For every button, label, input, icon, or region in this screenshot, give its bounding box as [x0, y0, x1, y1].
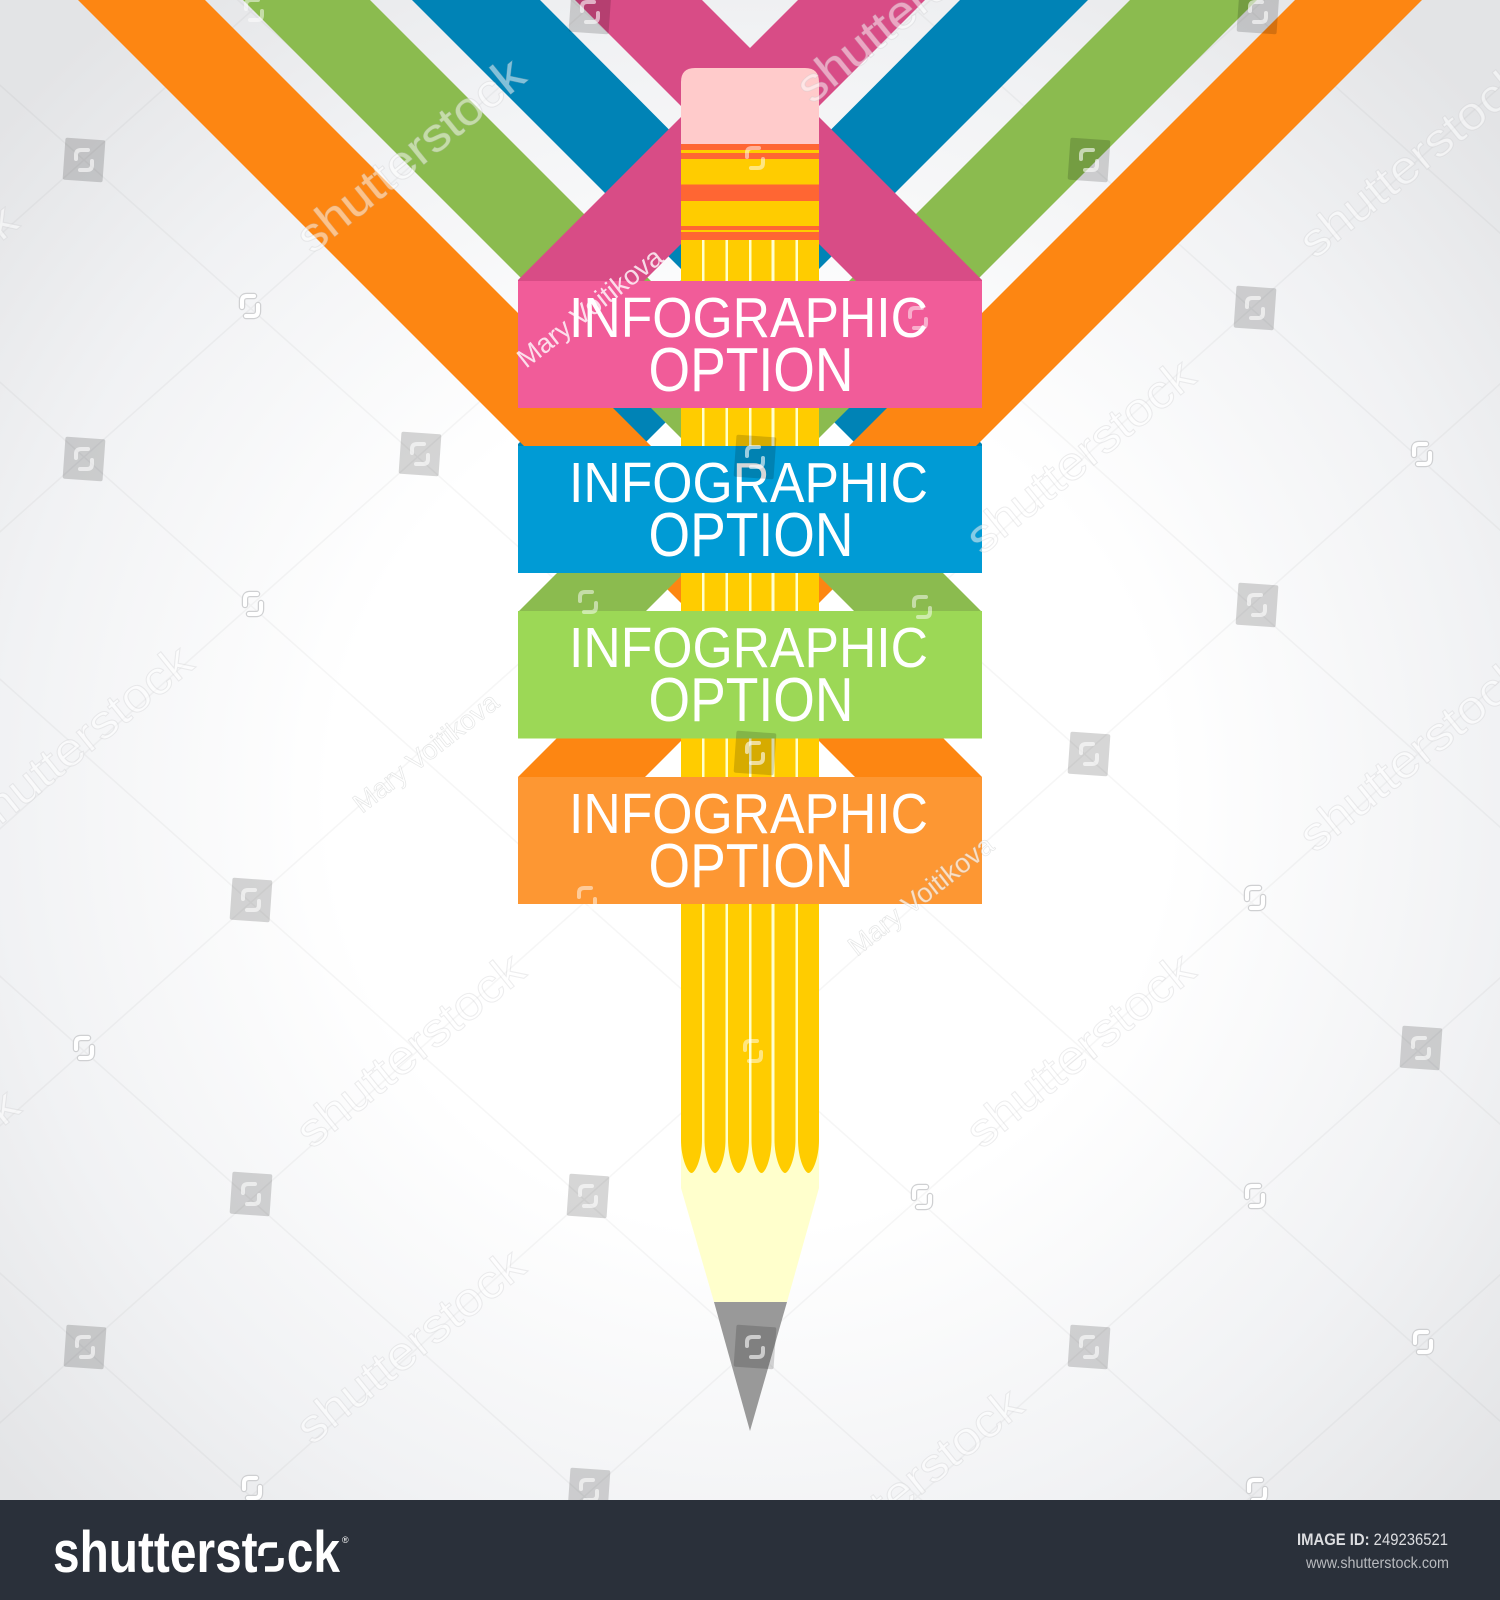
watermark: shutterstock text: shutterstock: [955, 941, 1205, 1158]
ribbon strands: orange: [78, 0, 1422, 777]
pencil eraser: [681, 68, 819, 144]
banner: pink option: INFOGRAPHIC: [569, 286, 928, 350]
banner: green option: OPTION: [648, 666, 854, 735]
footer bar: [0, 1500, 1500, 1600]
banner: orange option: [518, 777, 982, 904]
watermark: author name: Mary Voitikova: [347, 686, 505, 819]
footer url: www.shutterstock.com: [1305, 1555, 1449, 1572]
watermark: author name: [347, 241, 1000, 962]
ribbon strands: blue: [412, 0, 1088, 446]
watermark: shutterstock text: shutterstock: [285, 1237, 535, 1454]
ribbon strands: pink: [518, 0, 982, 281]
watermark: shutterstock text: shutterstock: [285, 46, 535, 263]
pencil graphite point: [714, 1302, 787, 1431]
banner: blue option: INFOGRAPHIC: [569, 451, 928, 515]
watermark: shutterstock text: shutterstock: [285, 941, 535, 1158]
banner: green option: INFOGRAPHIC: [569, 616, 928, 680]
ribbon strands: green: [243, 0, 1257, 612]
watermark: shutterstock text: shutterstock: [783, 1376, 1033, 1593]
watermark: author name: Mary Voitikova: [511, 241, 669, 374]
watermark: shutterstock text: shutterstock: [955, 347, 1205, 564]
pencil wood tip: [681, 240, 819, 1302]
banner: green option: [518, 611, 982, 738]
footer image id: IMAGE ID: 249236521: [1297, 1530, 1448, 1549]
banner: pink option: [518, 281, 982, 408]
banner: blue option: [518, 446, 982, 573]
pencil ferrule: [681, 144, 819, 240]
footer logo: shutterstock: [53, 1520, 341, 1585]
pencil body stripes: [681, 240, 819, 1173]
watermark: author name: Mary Voitikova: [842, 829, 1000, 962]
banner: orange option: OPTION: [648, 832, 854, 901]
banner: orange option: INFOGRAPHIC: [569, 782, 928, 846]
banner: pink option: OPTION: [648, 336, 854, 405]
banner: blue option: OPTION: [648, 501, 854, 570]
footer logo: ®: [342, 1535, 349, 1545]
pencil: [681, 68, 819, 1431]
